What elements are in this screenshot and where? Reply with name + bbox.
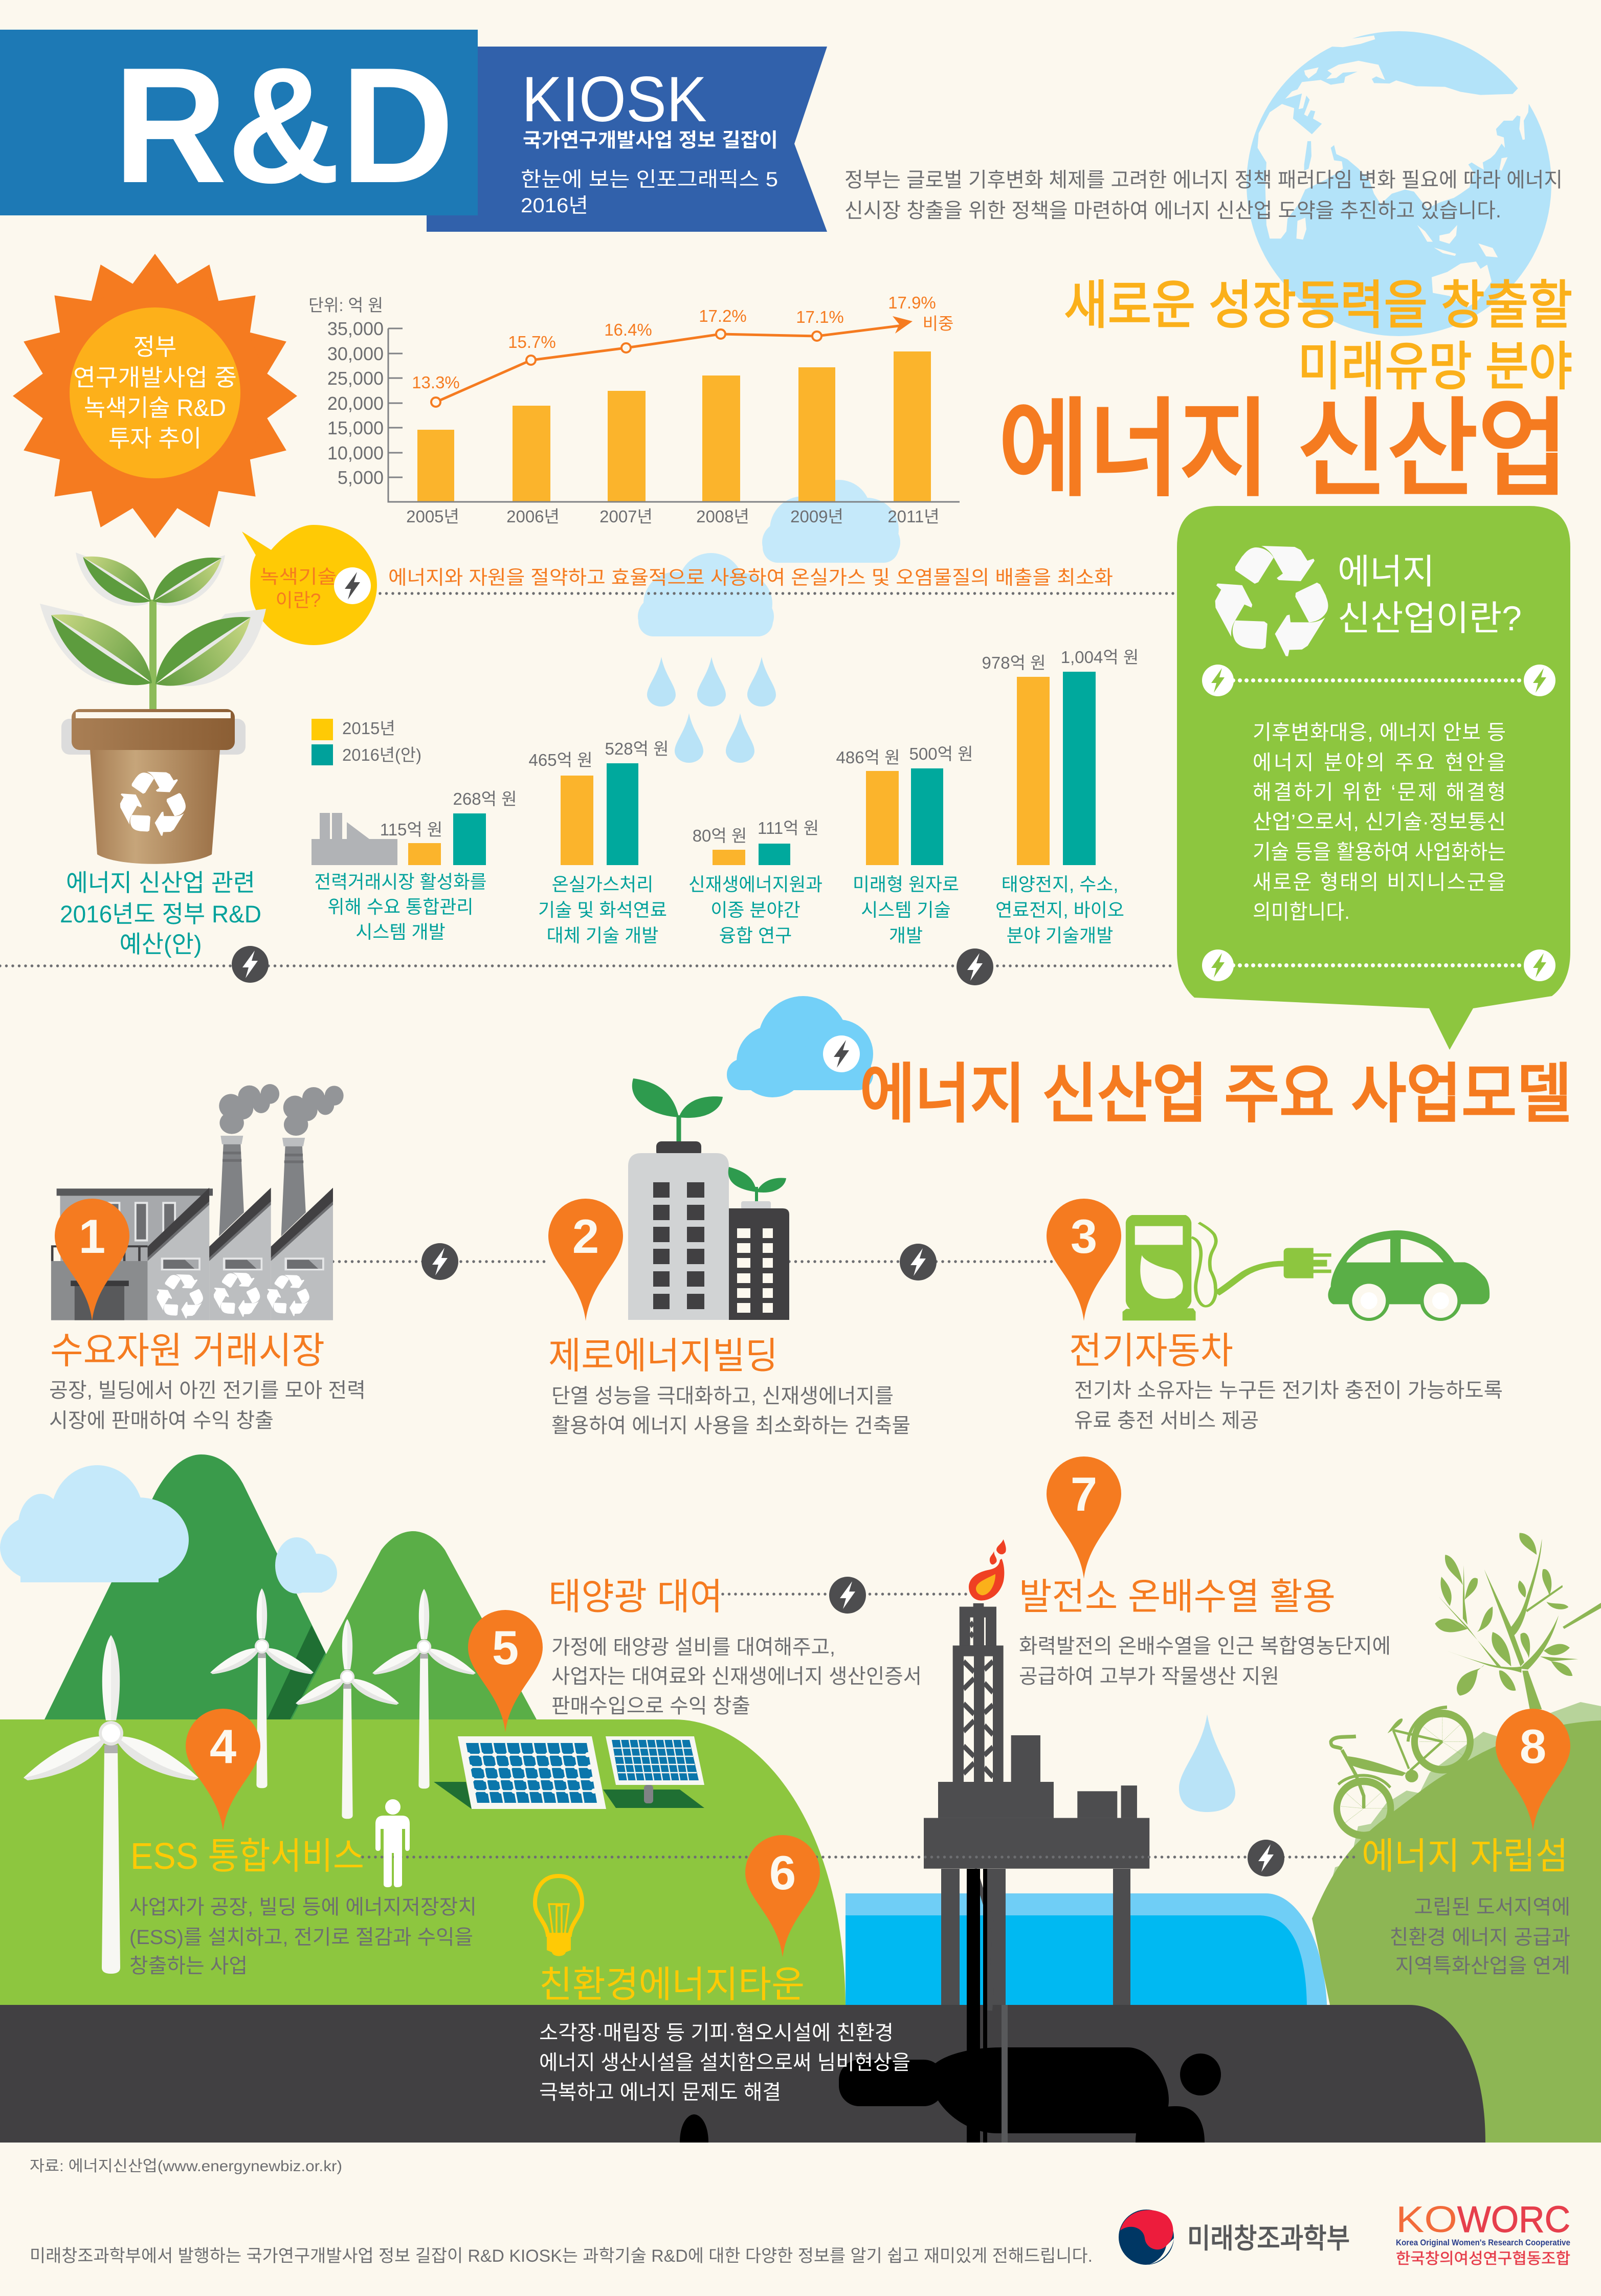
- business 7: power plant waste heat: 화력발전의 온배수열을 인근 복합영농단지에: [1019, 1635, 1391, 1658]
- budget item captions: 신재생에너지원과: [688, 874, 822, 895]
- budget item captions: 대체 기술 개발: [547, 925, 658, 946]
- business 5: solar lease: 판매수입으로 수익 창출: [551, 1695, 750, 1717]
- caption: 2016 government budget: 예산(안): [119, 931, 202, 958]
- marker 3: [1047, 1199, 1121, 1321]
- marker 2: [548, 1199, 623, 1321]
- budget item captions: 분야 기술개발: [1007, 925, 1113, 946]
- business 6: eco energy town: 소각장·매립장 등 기피·혐오시설에 친환경: [539, 2022, 894, 2044]
- icon: bolt island line: [1248, 1840, 1284, 1876]
- budget item captions: 연료전지, 바이오: [995, 899, 1124, 920]
- logo: ministry: [1119, 2210, 1350, 2265]
- business 5: solar lease: 사업자는 대여료와 신재생에너지 생산인증서: [551, 1665, 922, 1688]
- chart legend: 2016년(안): [342, 745, 421, 764]
- panel: what is new energy industry: [1177, 506, 1570, 1050]
- logo: R&D panel: 한눈에 보는 인포그래픽스 5: [521, 168, 778, 191]
- panel: what is new energy industry: 기후변화대응, 에너지 안보 등: [1253, 721, 1506, 744]
- budget bar chart: [380, 648, 1139, 865]
- business 5: solar lease: 태양광 대여: [548, 1577, 723, 1618]
- water drop: [1179, 1714, 1235, 1812]
- logo: ministry: 미래창조과학부: [1187, 2223, 1350, 2254]
- chart: green tech R&D investment: 35,000: [327, 318, 384, 339]
- budget bar chart: 500억 원: [909, 744, 973, 763]
- intro text: [844, 169, 1563, 222]
- business 5: solar lease: 5: [492, 1621, 519, 1674]
- panel: what is new energy industry: 기술 등을 활용하여 사업화하는: [1253, 841, 1506, 864]
- business 2: zero energy building: 활용하여 에너지 사용을 최소화하는 건축물: [551, 1415, 910, 1437]
- business 6: eco energy town: 극복하고 에너지 문제도 해결: [539, 2081, 781, 2104]
- person: [375, 1799, 410, 1887]
- chart: green tech R&D investment: 2011년: [887, 507, 940, 526]
- business 6: eco energy town: 6: [769, 1846, 796, 1900]
- sun badge: 연구개발사업 중: [73, 364, 237, 391]
- mountains: [45, 1454, 537, 1719]
- budget bar chart: 978억 원: [982, 653, 1046, 672]
- business 3: electric vehicles: [1069, 1331, 1503, 1432]
- panel: what is new energy industry: 새로운 형태의 비지니스군을: [1253, 871, 1506, 894]
- chart: green tech R&D investment: 5,000: [338, 467, 384, 488]
- icon: bolt 1-2: [421, 1243, 458, 1280]
- solar panels: [434, 1736, 704, 1809]
- clouds over mountains: [0, 1465, 337, 1594]
- business 6: eco energy town: [539, 1835, 910, 2104]
- budget item captions: 전력거래시장 활성화를: [314, 871, 487, 892]
- caption: 2016 government budget: 2016년도 정부 R&D: [60, 900, 261, 928]
- callout: green technology definition: 에너지와 자원을 절약하고 효율적으로 사용하여 온실가스 및 오염물질의 배출을 최소화: [388, 567, 1113, 589]
- logo: R&D panel: 2016년: [521, 194, 588, 217]
- business 6: eco energy town: 에너지 생산시설을 설치함으로써 님비현상을: [539, 2051, 910, 2074]
- callout: green technology definition: [242, 525, 1113, 645]
- tree and bicycle: [1331, 1533, 1601, 1836]
- budget item captions: 시스템 기술: [861, 899, 951, 920]
- chart: green tech R&D investment: 비중: [923, 314, 953, 333]
- budget item captions: 위해 수요 통합관리: [328, 896, 473, 917]
- budget item captions: 이종 분야간: [710, 899, 800, 920]
- business 5: solar lease: 가정에 태양광 설비를 대여해주고,: [551, 1636, 835, 1659]
- budget bar chart: 268억 원: [453, 789, 517, 808]
- chart: green tech R&D investment: 20,000: [327, 393, 384, 414]
- budget bar chart: 115억 원: [380, 820, 442, 839]
- business 7: power plant waste heat: 7: [1071, 1467, 1097, 1521]
- business 1: demand resource market: 수요자원 거래시장: [50, 1331, 325, 1372]
- chart: green tech R&D investment: 15.7%: [508, 333, 556, 351]
- logo: R&D panel: R&D: [114, 34, 454, 217]
- ground: [0, 1719, 1327, 2021]
- headline: 미래유망 분야: [1298, 338, 1572, 396]
- icon: bolt solar line: [829, 1577, 866, 1614]
- right hill with grass: [1312, 1702, 1601, 2143]
- logo: R&D panel: 국가연구개발사업 정보 길잡이: [523, 130, 778, 151]
- icon: green building: [628, 1078, 789, 1320]
- chart: green tech R&D investment: 13.3%: [412, 373, 460, 392]
- budget bar chart: 486억 원: [836, 748, 900, 767]
- business 5: solar lease: [468, 1577, 922, 1732]
- budget item captions: 미래형 원자로: [853, 874, 959, 895]
- business 8: energy independent island: 에너지 자립섬: [1362, 1836, 1568, 1877]
- budget item captions: 시스템 개발: [355, 921, 446, 942]
- icon: bolt 2-3: [900, 1244, 937, 1281]
- business 2: zero energy building: 제로에너지빌딩: [548, 1336, 778, 1377]
- panel: what is new energy industry: 에너지 분야의 주요 현안을: [1253, 752, 1506, 774]
- business 4: ESS service: 4: [210, 1719, 236, 1773]
- chart: green tech R&D investment: 17.2%: [699, 306, 747, 325]
- budget bar chart: 1,004억 원: [1061, 648, 1139, 667]
- wind turbines: [24, 1588, 476, 1974]
- icon: electric car charging: [1123, 1215, 1489, 1321]
- callout: green technology definition: 이란?: [276, 590, 321, 611]
- intro text: 정부는 글로벌 기후변화 체제를 고려한 에너지 정책 패러다임 변화 필요에 따라 에너지: [844, 169, 1563, 191]
- icon: flame: [969, 1539, 1006, 1601]
- chart: green tech R&D investment: 15,000: [327, 417, 384, 438]
- caption: 2016 government budget: [60, 869, 261, 958]
- chart: green tech R&D investment: 2007년: [599, 507, 653, 526]
- icon: bolt right: [957, 948, 993, 985]
- business 7: power plant waste heat: [1019, 1456, 1391, 1688]
- oil rig and black underground deposit: [0, 1539, 1485, 2143]
- business 1: demand resource market: 공장, 빌딩에서 아낀 전기를 모아 전력: [49, 1379, 366, 1402]
- business 7: power plant waste heat: 발전소 온배수열 활용: [1019, 1577, 1336, 1618]
- business 4: ESS service: 사업자가 공장, 빌딩 등에 에너지저장장치: [129, 1896, 477, 1918]
- headline: [998, 276, 1572, 509]
- marker 3: 3: [1071, 1209, 1097, 1263]
- sun badge: 녹색기술 R&D: [84, 394, 226, 421]
- budget item captions: 온실가스처리: [552, 874, 653, 895]
- icon: light bulb: [535, 1876, 582, 1956]
- business 1: demand resource market: 시장에 판매하여 수익 창출: [49, 1409, 274, 1432]
- budget bar chart: 80억 원: [693, 826, 747, 845]
- caption: 2016 government budget: 에너지 신산업 관련: [66, 869, 255, 896]
- business 2: zero energy building: 단열 성능을 극대화하고, 신재생에너지를: [551, 1385, 894, 1407]
- business 2: zero energy building: [548, 1336, 910, 1437]
- business 4: ESS service: 창출하는 사업: [129, 1955, 248, 1977]
- sun badge: 투자 추이: [108, 425, 202, 452]
- chart: green tech R&D investment: 2006년: [506, 507, 560, 526]
- chart: green tech R&D investment: 17.1%: [796, 307, 844, 326]
- budget bar chart: 528억 원: [605, 739, 669, 758]
- sun badge: 정부: [134, 334, 176, 360]
- plant in pot: [38, 544, 266, 864]
- chart legend: 2015년: [342, 719, 395, 738]
- chart: green tech R&D investment: 25,000: [327, 368, 384, 389]
- logo: R&D panel: [0, 30, 827, 232]
- logo: KOWORC: WORC: [1457, 2199, 1570, 2240]
- budget item captions: 융합 연구: [719, 925, 792, 946]
- logo: R&D panel: KIOSK: [522, 64, 707, 135]
- budget item captions: 개발: [889, 925, 923, 946]
- business 8: energy independent island: [1362, 1709, 1570, 1977]
- business 7: power plant waste heat: 공급하여 고부가 작물생산 지원: [1019, 1665, 1279, 1688]
- business 8: energy independent island: 친환경 에너지 공급과: [1390, 1926, 1570, 1949]
- business 8: energy independent island: 지역특화산업을 연계: [1395, 1955, 1570, 1977]
- panel: what is new energy industry: 에너지: [1338, 553, 1435, 591]
- marker 1: [55, 1199, 129, 1321]
- logo: KOWORC: 한국창의여성연구협동조합: [1396, 2250, 1570, 2267]
- business 3: electric vehicles: 유료 충전 서비스 제공: [1074, 1409, 1259, 1432]
- chart: green tech R&D investment: 단위: 억 원: [308, 296, 383, 315]
- business 1: demand resource market: [49, 1331, 366, 1432]
- callout: green technology definition: 녹색기술: [260, 566, 337, 587]
- intro text: 신시장 창출을 위한 정책을 마련하여 에너지 신산업 도약을 추진하고 있습니다.: [844, 200, 1501, 222]
- chart: green tech R&D investment: 10,000: [327, 443, 384, 463]
- footer text: 미래창조과학부에서 발행하는 국가연구개발사업 정보 길잡이 R&D KIOSK는 과학기술 R&D에 대한 다양한 정보를 알기 쉽고 재미있게 전해드립니다.: [30, 2246, 1093, 2266]
- icon: bolt left: [232, 946, 269, 983]
- chart: green tech R&D investment: 2005년: [406, 507, 459, 526]
- panel: what is new energy industry: 산업’으로서, 신기술·정보통신: [1253, 811, 1506, 833]
- chart: green tech R&D investment: [308, 293, 960, 526]
- panel: what is new energy industry: 해결하기 위한 ‘문제 해결형: [1253, 781, 1506, 804]
- panel: what is new energy industry: 신산업이란?: [1338, 599, 1522, 638]
- marker 2: 2: [572, 1209, 599, 1263]
- budget item captions: 태양전지, 수소,: [1002, 874, 1118, 895]
- chart: green tech R&D investment: 30,000: [327, 343, 384, 364]
- globe: [1247, 31, 1551, 336]
- business 8: energy independent island: 고립된 도서지역에: [1414, 1896, 1570, 1918]
- marker 1: 1: [79, 1209, 105, 1263]
- business 8: energy independent island: 8: [1520, 1719, 1546, 1773]
- logo: KOWORC: Korea Original Women's Research Cooperative: [1396, 2238, 1570, 2247]
- business 4: ESS service: [129, 1709, 477, 1977]
- logo: KOWORC: [1396, 2199, 1570, 2267]
- chart: green tech R&D investment: 2008년: [696, 507, 749, 526]
- sun badge: [13, 254, 297, 538]
- business 4: ESS service: (ESS)를 설치하고, 전기로 절감과 수익을: [129, 1926, 473, 1949]
- icon: small factory: [312, 813, 397, 865]
- chart: green tech R&D investment: 2009년: [790, 507, 843, 526]
- headline: 에너지 신산업: [998, 390, 1568, 509]
- budget item captions: [314, 871, 1124, 946]
- clouds and rain drops: [638, 480, 900, 763]
- source: 자료: 에너지신산업(www.energynewbiz.or.kr): [30, 2158, 342, 2175]
- business 4: ESS service: ESS 통합서비스: [130, 1836, 364, 1877]
- chart: green tech R&D investment: 17.9%: [888, 293, 936, 312]
- logo: KOWORC: KO: [1396, 2199, 1457, 2240]
- icon: factory: [51, 1084, 344, 1321]
- business 3: electric vehicles: 전기자동차: [1069, 1331, 1233, 1372]
- chart: green tech R&D investment: 16.4%: [604, 320, 652, 339]
- budget bar chart: 465억 원: [529, 750, 592, 769]
- chart legend: [312, 719, 421, 765]
- panel: what is new energy industry: 의미합니다.: [1253, 901, 1350, 923]
- business 6: eco energy town: 친환경에너지타운: [539, 1964, 805, 2005]
- business 3: electric vehicles: 전기차 소유자는 누구든 전기차 충전이 가능하도록: [1074, 1379, 1503, 1402]
- budget bar chart: 111억 원: [758, 819, 819, 837]
- budget item captions: 기술 및 화석연료: [538, 899, 667, 920]
- blue cloud icon: [727, 996, 873, 1097]
